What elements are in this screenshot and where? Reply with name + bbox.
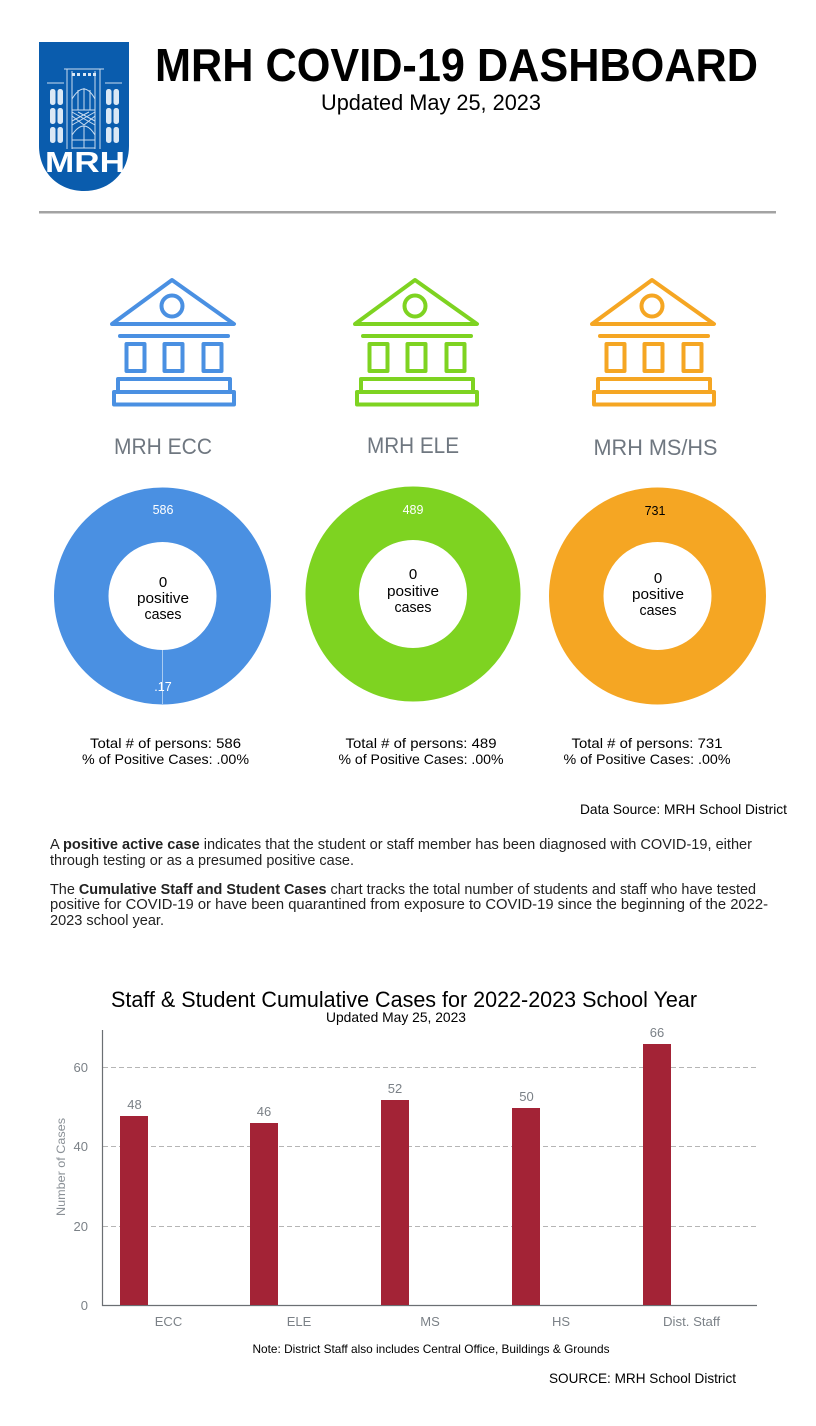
y axis labels: 60: [74, 1060, 88, 1075]
data source note: Data Source: MRH School District: [580, 801, 787, 817]
stats: ELE: % of Positive Cases: .00%: [338, 751, 504, 767]
y axis title: Number of Cases: [54, 1118, 68, 1216]
text block: cumulative chart explanation: 2023 school year.: [50, 913, 164, 929]
donut chart: MS/HS: cases: [640, 602, 676, 619]
stats: ECC: Total # of persons: 586: [90, 735, 241, 751]
donut chart: ELE: 489: [403, 503, 423, 517]
donut chart: ECC: [81, 503, 244, 704]
panel: MRH MS/HS: [564, 280, 739, 767]
stats: MS/HS: % of Positive Cases: .00%: [564, 751, 730, 767]
chart title: Staff & Student Cumulative Cases for 2022-2023 School Year: [111, 987, 697, 1012]
y axis labels: 20: [74, 1219, 88, 1234]
source note: SOURCE: MRH School District: [549, 1370, 736, 1386]
bar value labels: 50: [519, 1089, 534, 1104]
text block: cumulative chart explanation: [50, 882, 768, 929]
bar value labels: 52: [388, 1081, 402, 1096]
donut chart: ECC: positive: [137, 590, 189, 607]
bar value labels: 46: [257, 1104, 271, 1119]
panel: MRH ELE: [332, 280, 504, 767]
x axis labels: Dist. Staff: [663, 1314, 720, 1329]
bar chart: cumulative cases: [54, 987, 757, 1329]
y axis labels: [74, 1060, 88, 1313]
stats: ELE: [338, 735, 504, 767]
label: MRH MS/HS: MRH MS/HS: [594, 435, 718, 460]
panel: MRH ECC: [81, 280, 249, 767]
donut chart: ECC: 0: [159, 574, 167, 591]
donut chart: ELE: 0: [409, 566, 417, 583]
x axis labels: ELE: [287, 1314, 312, 1329]
donut chart: MS/HS: 0: [654, 570, 662, 587]
donut chart: MS/HS: 731: [645, 504, 665, 518]
bar value labels: [127, 1025, 664, 1119]
donut chart: ECC: 586: [153, 503, 173, 517]
donut chart: ELE: [332, 503, 494, 675]
chart note: Note: District Staff also includes Central Office, Buildings & Grounds: [252, 1342, 610, 1356]
bar value labels: 48: [127, 1097, 142, 1112]
icon: ELE building: [355, 280, 477, 404]
stats: MS/HS: [564, 735, 730, 767]
x axis labels: ECC: [155, 1314, 182, 1329]
icon: MS/HS building: [592, 280, 714, 404]
bars: [120, 1044, 671, 1305]
title: MRH COVID-19 DASHBOARD: [155, 39, 758, 91]
bar value labels: 66: [650, 1025, 664, 1040]
text block: positive active case definition: through testing or as a presumed positive case.: [50, 853, 354, 869]
text block: positive active case definition: A positive active case indicates that the student or staff member has been diagnosed with COVID-19, either: [50, 837, 752, 853]
icon: MRH school logo shield: [39, 42, 129, 191]
donut chart: MS/HS: [576, 504, 739, 677]
stats: ECC: % of Positive Cases: .00%: [82, 751, 249, 767]
subtitle: update date: Updated May 25, 2023: [321, 90, 541, 115]
stats: ECC: [82, 735, 249, 767]
y axis labels: 40: [74, 1139, 88, 1154]
label: MRH ECC: MRH ECC: [114, 434, 212, 459]
chart subtitle: Updated May 25, 2023: [326, 1009, 466, 1025]
icon: MRH school logo shield: MRH: [45, 147, 125, 179]
text block: cumulative chart explanation: positive for COVID-19 or have been quarantined from exposure to COVID-19 since the beginning of the 2022-: [50, 897, 768, 913]
y axis labels: 0: [81, 1298, 88, 1313]
text block: positive active case definition: [50, 837, 752, 869]
donut chart: ELE: positive: [387, 583, 439, 600]
stats: ELE: Total # of persons: 489: [346, 735, 497, 751]
text block: cumulative chart explanation: The Cumulative Staff and Student Cases chart tracks the total number of students and staff who have tested: [50, 882, 756, 898]
x axis labels: [155, 1314, 720, 1329]
x axis labels: HS: [552, 1314, 570, 1329]
label: MRH ELE: MRH ELE: [367, 433, 459, 458]
donut chart: ECC: cases: [144, 606, 182, 623]
x axis labels: MS: [420, 1314, 440, 1329]
donut chart: ECC: .17: [154, 680, 172, 694]
donut chart: MS/HS: positive: [632, 586, 684, 603]
donut chart: ELE: cases: [394, 599, 432, 616]
stats: MS/HS: Total # of persons: 731: [572, 735, 723, 751]
icon: ECC building: [112, 280, 234, 404]
